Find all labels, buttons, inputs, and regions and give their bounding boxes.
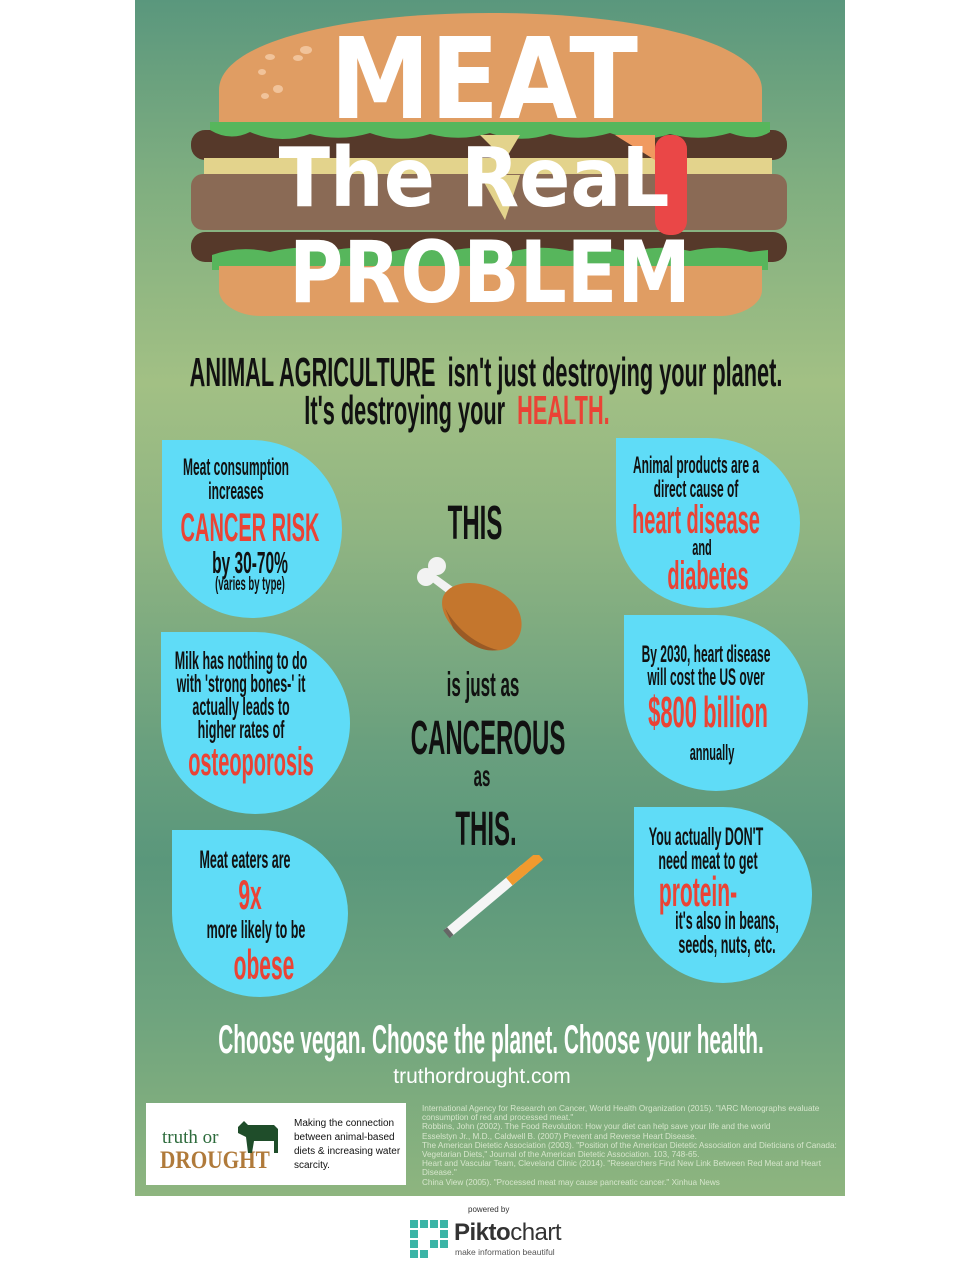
bubble: heart disease: Animal products are a xyxy=(633,452,759,479)
bubble: $800 billion xyxy=(624,615,808,791)
center text: CANCEROUS: CANCEROUS xyxy=(411,712,565,765)
title: MEAT: MEAT xyxy=(330,15,638,145)
bubble: heart disease: direct cause of xyxy=(654,476,738,503)
piktochart branding xyxy=(410,1205,562,1258)
bubble: protein: protein- xyxy=(659,868,737,915)
center text: THIS.: THIS. xyxy=(455,803,517,856)
top lettuce and patty xyxy=(191,122,787,160)
icon: cigarette xyxy=(444,855,544,938)
references text: China View (2005). "Processed meat may cause pancreatic cancer." Xinhua News xyxy=(422,1178,720,1187)
bubble: $800 billion: By 2030, heart disease xyxy=(642,641,770,668)
bubble: obese: Meat eaters are xyxy=(199,846,291,874)
center text: is just as: is just as xyxy=(447,666,519,704)
piktochart branding: Piktochart xyxy=(454,1219,561,1246)
bubble: protein: You actually DON'T xyxy=(649,823,763,851)
ketchup drip xyxy=(480,135,687,235)
bubble: heart disease: diabetes xyxy=(667,554,749,598)
references text: Esselstyn Jr., M.D., Caldwell B. (2007) Prevent and Reverse Heart Disease. xyxy=(422,1132,697,1141)
bubble: $800 billion: annually xyxy=(690,740,734,765)
bubble: protein: seeds, nuts, etc. xyxy=(678,931,776,959)
title: PROBLEM: PROBLEM xyxy=(289,223,691,323)
logo box: truth or drought xyxy=(146,1103,406,1185)
bubble: cancer risk: CANCER RISK xyxy=(181,506,319,550)
references text: International Agency for Research on Cancer, World Health Organization (2015). "IARC Monographs evaluate consumption of red and processed meat." xyxy=(422,1104,819,1122)
logo box: truth or drought: truth or xyxy=(162,1127,218,1148)
bubble: $800 billion: will cost the US over xyxy=(647,664,765,691)
website url: truthordrought.com xyxy=(393,1065,571,1088)
bubble: obese xyxy=(172,830,348,997)
bubble: protein: need meat to get xyxy=(658,847,758,875)
bubble: cancer risk xyxy=(162,440,342,618)
bubble: protein: it's also in beans, xyxy=(675,907,779,935)
top bun xyxy=(219,13,762,128)
bubble: protein xyxy=(634,807,812,983)
bottom bun xyxy=(219,266,762,316)
logo box: truth or drought: Making the connection between animal-based diets & increasing water scarcity. xyxy=(294,1118,400,1171)
references text: Robbins, John (2002). The Food Revolution: How your diet can help save your life and the world xyxy=(422,1122,770,1131)
burger illustration with title xyxy=(191,13,787,316)
piktochart branding: make information beautiful xyxy=(455,1247,555,1257)
bubble: heart disease: and xyxy=(692,535,712,560)
piktochart branding: powered by xyxy=(468,1205,509,1214)
bubble: obese: 9x xyxy=(238,871,262,918)
headline xyxy=(190,349,782,433)
center text: as: as xyxy=(474,760,490,793)
bubble: cancer risk: by 30-70% xyxy=(212,545,288,580)
logo box: truth or drought: DROUGHT xyxy=(160,1147,270,1174)
title: The Real: The ReaL xyxy=(279,131,669,226)
bubble: cancer risk: (varies by type) xyxy=(215,574,285,595)
bubble: osteoporosis: actually leads to xyxy=(192,693,290,721)
bubble: cancer risk: increases xyxy=(208,478,264,505)
bubble: osteoporosis: osteoporosis xyxy=(188,740,314,784)
references text: The American Dietetic Association (2003). "Position of the American Dietetic Association and Dieticians of Canada: Vegetarian Diets," Journal of the American Dietetic Association. 103, 748-65. xyxy=(422,1141,837,1159)
bubble: obese: obese xyxy=(234,941,294,988)
bubble: cancer risk: Meat consumption xyxy=(183,454,289,481)
bubble: heart disease: heart disease xyxy=(632,498,760,542)
references text: Heart and Vascular Team, Cleveland Clinic (2014). "Researchers Find New Link Between Red Meat and Heart Disease." xyxy=(422,1159,821,1177)
bubble: osteoporosis: Milk has nothing to do xyxy=(175,647,307,675)
center text: THIS: THIS xyxy=(448,497,502,550)
bubble: osteoporosis xyxy=(161,632,350,814)
bubble: heart disease xyxy=(616,438,800,608)
panel: main background xyxy=(135,0,845,1196)
icon: chicken drumstick xyxy=(417,557,522,650)
tagline: Choose vegan. Choose the planet. Choose your health. xyxy=(218,1018,764,1062)
bubble: $800 billion: $800 billion xyxy=(648,688,768,737)
references text xyxy=(422,1104,837,1187)
patty xyxy=(191,174,787,230)
headline: ANIMAL AGRICULTURE isn't just destroying your planet. xyxy=(190,349,782,395)
bubble: osteoporosis: with 'strong bones-' it xyxy=(177,670,305,698)
bottom patty and lettuce xyxy=(191,232,787,270)
headline: It's destroying your HEALTH. xyxy=(304,387,610,433)
bubble: obese: more likely to be xyxy=(207,916,305,944)
bubble: osteoporosis: higher rates of xyxy=(198,716,284,744)
cheese xyxy=(204,158,772,176)
